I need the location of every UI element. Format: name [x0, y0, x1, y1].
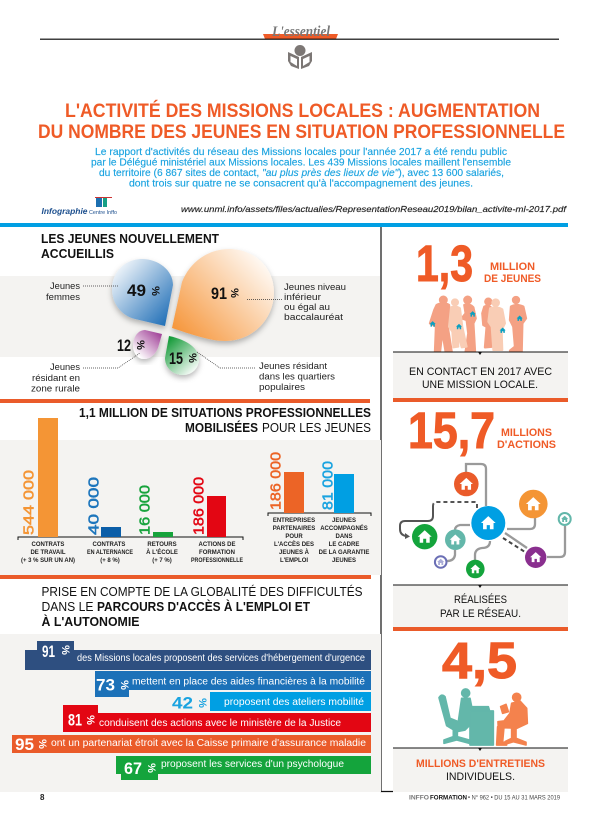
- network diagram: [400, 464, 571, 578]
- label: niveau baccalauréat: inférieur: [284, 292, 321, 302]
- bar: 81 % justice: [63, 705, 371, 732]
- node: centre: [471, 506, 505, 540]
- label: niveau baccalauréat: [247, 282, 346, 322]
- caption: entreprises partenaires: POUR: [285, 534, 303, 540]
- label: niveau baccalauréat: Jeunes niveau: [284, 282, 346, 292]
- bar: 91 % hébergement: 91: [42, 642, 55, 661]
- petal: 15 % green: %: [186, 353, 198, 363]
- caption: entreprises partenaires: L'ACCÈS DES: [274, 540, 314, 548]
- caption: jeunes garantie: ACCOMPAGNÉS: [320, 524, 368, 532]
- intro text: Le rapport d'activités du réseau des Missions locales pour l'année 2017 a été rendu public: [95, 146, 507, 158]
- label: jeunes femmes: [46, 281, 118, 302]
- heading: globalité des difficultés: À L'AUTONOMIE: [42, 614, 140, 629]
- petal: 91 % orange: 91: [211, 284, 227, 303]
- blue divider: [0, 223, 568, 227]
- label: jeunes femmes: Jeunes: [50, 281, 81, 291]
- title: DU NOMBRE DES JEUNES EN SITUATION PROFESSIONNELLE: [38, 122, 565, 143]
- heading: globalité des difficultés: [42, 584, 363, 629]
- label: jeunes femmes: femmes: [46, 292, 81, 302]
- bar: 73 % aides mobilité: %: [118, 680, 130, 690]
- callout: en contact: UNE MISSION LOCALE.: [422, 379, 538, 391]
- source url: www.unml.info/assets/files/actualies/RepresentationReseau2019/bilan_activite-ml-2017.pdf: [181, 204, 568, 214]
- petal: 12 % purple: 12: [117, 336, 131, 355]
- petal: 49 % blue: [112, 259, 173, 326]
- callout: millions d'entretiens individuels: MILLIONS D'ENTRETIENS: [416, 758, 545, 770]
- caption: contrats en alternance: EN ALTERNANCE: [87, 550, 133, 556]
- panel: 15,7 millions d'actions: [393, 402, 571, 631]
- big number 4,5: 4,5: [442, 632, 517, 689]
- bar: 67 % psychologue: [116, 756, 371, 780]
- heading: globalité des difficultés: DANS LE: [42, 599, 94, 614]
- title: [38, 100, 565, 143]
- label: millions d'actions: D'ACTIONS: [497, 439, 556, 451]
- bar: 81 % justice: 81: [68, 710, 82, 730]
- petal: 91 % orange: [172, 249, 274, 341]
- footer: Inffo Formation: FORMATION: [430, 794, 467, 802]
- panel: situations professionnelles: [0, 405, 381, 575]
- bar: 73 % aides mobilité: [95, 671, 371, 697]
- title: L'ACTIVITÉ DES MISSIONS LOCALES : AUGMENTATION: [65, 100, 540, 122]
- heading: jeunes accueillis: [41, 231, 219, 261]
- intro text: dont trois sur quatre ne se consacrent qu'à l'accompagnement des jeunes.: [129, 178, 473, 190]
- bar: 81 % justice: %: [84, 715, 96, 725]
- heading: situations professionnelles: [79, 405, 371, 435]
- credit: Infographie Centre Inffo: [42, 197, 117, 216]
- intro text: [91, 146, 511, 190]
- orange divider: [0, 399, 370, 403]
- bar chart: entreprises et garantie jeunes: 186 000: [268, 452, 284, 510]
- caption: contrats en alternance: [87, 542, 133, 564]
- icon: interview at a desk: [439, 689, 527, 745]
- bar chart: mobilisations: 16 000: [138, 485, 154, 535]
- caption: contrats de travail: [21, 542, 75, 564]
- label: quartiers populaires: populaires: [259, 382, 306, 392]
- caption: actions de formation: FORMATION: [199, 550, 235, 556]
- caption: actions de formation: PROFESSIONNELLE: [191, 558, 243, 564]
- petal: 15 % green: 15: [169, 349, 183, 368]
- intro text: du territoire (6 867 sites de contact, "au plus près des lieux de vie"), avec 13 600 salariés,: [99, 167, 504, 179]
- caption: contrats de travail: DE TRAVAIL: [30, 550, 66, 556]
- heading: situations professionnelles: POUR LES JEUNES: [262, 420, 371, 435]
- label: quartiers populaires: dans les quartiers: [259, 372, 336, 382]
- caption: entreprises partenaires: L'EMPLOI: [280, 558, 308, 564]
- icon: group of young people: [430, 297, 526, 352]
- label: quartiers populaires: Jeunes résidant: [259, 361, 328, 371]
- label: niveau baccalauréat: ou égal au: [284, 302, 330, 312]
- petal: 49 % blue: 49: [127, 281, 146, 300]
- node: green: [412, 524, 437, 549]
- caption: contrats en alternance: CONTRATS: [93, 542, 125, 548]
- caption: contrats de travail: (+ 3 % SUR UN AN): [21, 558, 75, 564]
- bar: 73 % aides mobilité: 73: [96, 676, 115, 694]
- label: quartiers populaires: [197, 352, 336, 392]
- caption: actions de formation: [191, 542, 243, 564]
- bar: 67 % psychologue: 67: [124, 759, 142, 778]
- bar chart: entreprises et garantie jeunes: 81 000: [320, 461, 336, 510]
- bar: 42 % ateliers mobilité: %: [196, 698, 208, 708]
- page number: 8: [40, 793, 45, 802]
- caption: entreprises partenaires: JEUNES À: [279, 549, 310, 556]
- petal: 15 % green: [165, 336, 199, 375]
- panel: prise en compte des difficultés: [0, 584, 381, 792]
- callout: réalisées par le réseau: PAR LE RÉSEAU.: [440, 607, 521, 620]
- heading: situations professionnelles: MOBILISÉES: [185, 420, 258, 435]
- petal: 12 % purple: %: [134, 340, 146, 350]
- bar: 73 % aides mobilité: mettent en place des aides financières à la mobilité: [132, 676, 365, 688]
- callout: millions d'entretiens individuels: [393, 748, 568, 792]
- bar: 67 % psychologue: proposent les services d'un psychologue: [161, 759, 344, 770]
- bar: 42 % ateliers mobilité: 42: [172, 694, 193, 712]
- caption: entreprises partenaires: ENTREPRISES: [273, 518, 315, 524]
- bar: 95 % assurance maladie: ont un partenariat étroit avec la Caisse primaire d'assurance maladie: [51, 738, 366, 749]
- label: million de jeunes: DE JEUNES: [484, 273, 541, 285]
- node: red-orange: [454, 472, 479, 496]
- caption: contrats de travail: CONTRATS: [32, 542, 64, 548]
- caption: retours à l'école: (+ 7 %): [152, 558, 172, 564]
- heading: jeunes accueillis: LES JEUNES NOUVELLEMENT: [41, 231, 219, 246]
- caption: jeunes garantie: DE LA GARANTIE: [319, 550, 369, 556]
- footer: Inffo Formation: INFFO: [409, 794, 429, 802]
- bar chart: mobilisations: [18, 418, 243, 564]
- heading: jeunes accueillis: ACCUEILLIS: [41, 246, 114, 261]
- footer: Inffo Formation: [409, 794, 560, 802]
- bar: 67 % psychologue: %: [145, 763, 157, 773]
- label: zone rurale: Jeunes: [50, 362, 81, 372]
- bar: 91 % hébergement: des Missions locales proposent des services d'hébergement d'urgence: [77, 653, 365, 664]
- petal: 49 % blue: %: [149, 286, 161, 296]
- header tab: L'essentiel: L'essentiel: [271, 24, 331, 40]
- callout: en contact: [393, 352, 568, 402]
- credit: Infographie Centre Inffo: Infographie: [42, 207, 88, 216]
- label: millions d'actions: MILLIONS: [501, 427, 552, 439]
- heading: globalité des difficultés: PRISE EN COMPTE DE LA GLOBALITÉ DES DIFFICULTÉS: [42, 584, 363, 599]
- callout: réalisées par le réseau: [393, 584, 568, 631]
- bar: 81 % justice: conduisent des actions avec le ministère de la Justice: [99, 718, 341, 729]
- label: zone rurale: zone rurale: [31, 384, 80, 394]
- petal: 91 % orange: %: [228, 288, 240, 298]
- big number 15,7: 15,7: [408, 402, 495, 459]
- callout: réalisées par le réseau: RÉALISÉES: [454, 593, 507, 606]
- petal: 12 % purple: [117, 330, 162, 359]
- caption: actions de formation: ACTIONS DE: [198, 542, 236, 548]
- caption: entreprises partenaires: PARTENAIRES: [273, 526, 315, 532]
- panel: les jeunes nouvellement accueillis: [0, 231, 380, 394]
- left column frame: [381, 227, 393, 792]
- bar: 95 % assurance maladie: 95: [15, 735, 34, 754]
- label: millions d'actions: [497, 427, 556, 451]
- caption: retours à l'école: RETOURS: [147, 542, 177, 548]
- big number 1,3: 1,3: [416, 235, 473, 292]
- intro text: par le Délégué ministériel aux Missions locales. Les 439 Missions locales maillent l'ensemble: [91, 156, 511, 168]
- label: niveau baccalauréat: baccalauréat: [284, 312, 344, 322]
- caption: entreprises partenaires: [273, 518, 315, 564]
- node: purple: [525, 547, 546, 568]
- label: million de jeunes: MILLION: [490, 261, 535, 273]
- caption: jeunes garantie: JEUNES: [332, 518, 356, 524]
- caption: jeunes garantie: LE CADRE: [329, 542, 359, 548]
- label: zone rurale: résidant en: [32, 373, 80, 383]
- heading: globalité des difficultés: PARCOURS D'ACCÈS À L'EMPLOI ET: [97, 599, 310, 614]
- bar: 95 % assurance maladie: [12, 735, 371, 754]
- caption: jeunes garantie: DANS: [335, 534, 353, 540]
- node: teal: [445, 529, 466, 550]
- caption: jeunes garantie: JEUNES: [332, 558, 356, 564]
- bar chart: mobilisations: 544 000: [22, 470, 38, 535]
- footer: Inffo Formation: • N° 962 • DU 15 AU 31 MARS 2019: [468, 794, 560, 802]
- caption: retours à l'école: À L'ÉCOLE: [146, 548, 178, 556]
- caption: retours à l'école: [146, 542, 178, 564]
- orange divider: [0, 575, 371, 579]
- node: orange: [519, 490, 548, 518]
- header tab: L'essentiel: [40, 24, 559, 40]
- bar chart: entreprises et garantie jeunes: [268, 452, 371, 564]
- node: small violet: [435, 556, 447, 568]
- caption: jeunes garantie: [319, 518, 369, 564]
- bar: 42 % ateliers mobilité: proposent des ateliers mobilité: [224, 697, 364, 708]
- panel: 1,3 million de jeunes: [393, 235, 568, 402]
- bar chart: mobilisations: 186 000: [192, 477, 208, 535]
- credit: Infographie Centre Inffo: Centre Inffo: [89, 210, 117, 216]
- bar chart: mobilisations: 40 000: [86, 477, 102, 535]
- callout: en contact: EN CONTACT EN 2017 AVEC: [409, 366, 552, 378]
- node: small teal: [559, 513, 571, 525]
- node: small green: [466, 560, 485, 578]
- icon: person reading: [288, 45, 312, 69]
- panel: 4,5 millions d'entretiens: [393, 632, 568, 792]
- bar: 95 % assurance maladie: %: [36, 739, 48, 749]
- bar: 42 % ateliers mobilité: [172, 692, 371, 712]
- caption: contrats en alternance: (+ 8 %): [100, 558, 120, 564]
- heading: situations professionnelles: 1,1 MILLION DE SITUATIONS PROFESSIONNELLES: [79, 405, 371, 420]
- label: million de jeunes: [484, 261, 541, 285]
- bar: 91 % hébergement: [25, 641, 371, 670]
- bar: 91 % hébergement: %: [59, 645, 71, 655]
- callout: millions d'entretiens individuels: INDIVIDUELS.: [446, 771, 515, 783]
- label: zone rurale: [31, 353, 140, 394]
